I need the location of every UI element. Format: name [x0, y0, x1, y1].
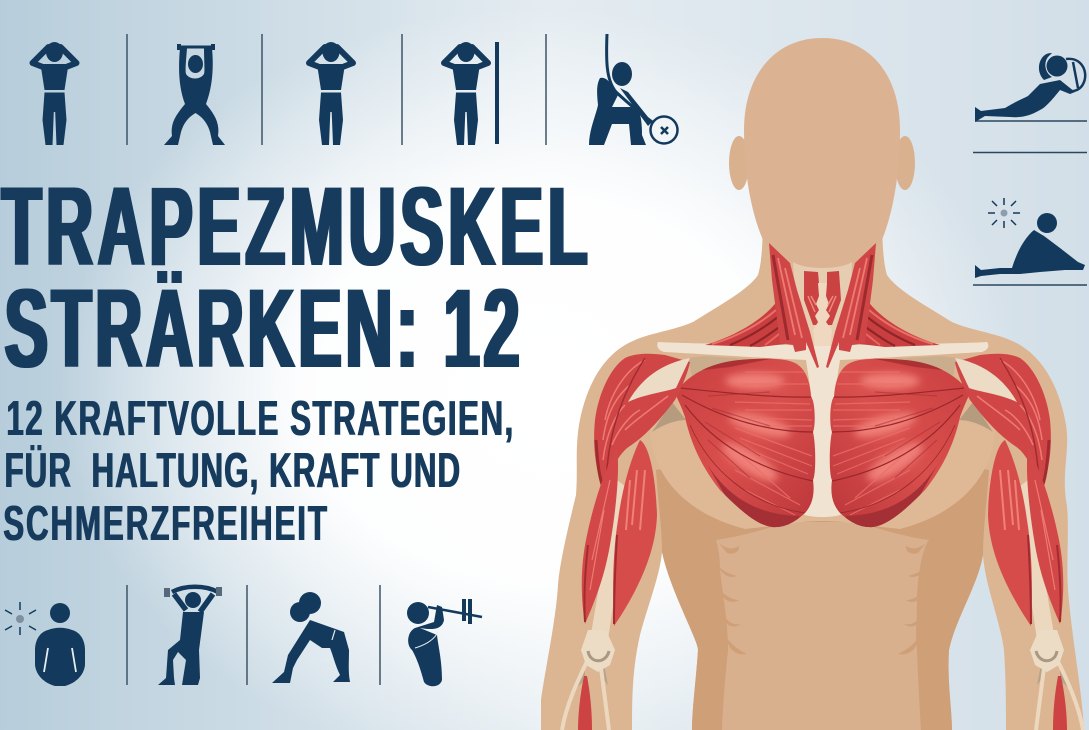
abdomen centre	[716, 522, 929, 730]
chest light area	[650, 380, 995, 529]
left muscle group	[562, 243, 819, 730]
divider lines right column	[973, 121, 1087, 285]
icon: seated stretch with pain burst	[975, 198, 1085, 278]
anatomical torso figure	[541, 38, 1084, 730]
upper arm bone strip	[590, 480, 630, 640]
torso side shading	[656, 440, 989, 730]
ribs	[718, 543, 927, 654]
icon: exercise hands behind head	[32, 42, 76, 145]
subtitle line 2: FÜR HALTUNG, KRAFT UND	[4, 443, 460, 498]
icon: back pain figure	[5, 602, 85, 686]
icon: kneeling with wheel	[589, 34, 678, 145]
right muscle group (mirror)	[826, 243, 1083, 730]
elbow and forearm	[562, 630, 615, 730]
biceps outer	[582, 447, 618, 624]
icon: standing with pole	[444, 42, 497, 145]
trapezius	[705, 300, 785, 347]
pectoralis	[675, 357, 815, 535]
sternum and clavicles	[657, 342, 988, 517]
collar shadow	[688, 356, 957, 376]
deltoid	[594, 354, 690, 492]
icon: standing stretch	[309, 42, 353, 145]
title line 2: STRÄRKEN: 12	[5, 267, 520, 391]
title: TRAPEZMUSKEL	[2, 165, 588, 289]
icon: bent over stretch	[272, 592, 350, 683]
body silhouette	[541, 205, 1084, 730]
icon: prone with ring	[975, 53, 1085, 122]
biceps inner	[613, 440, 657, 626]
armpit shadows	[652, 402, 993, 432]
sternocleidomastoid	[769, 243, 819, 368]
subtitle line 1: 12 KRAFTVOLLE STRATEGIEN,	[6, 391, 513, 446]
neck gap tissue	[793, 262, 852, 345]
head	[744, 38, 900, 268]
neck centre muscles and spine	[804, 271, 841, 352]
dividers bottom row	[127, 585, 380, 685]
subtitle line 3: SCHMERZFREIHEIT	[3, 496, 327, 551]
dividers top row	[127, 34, 546, 145]
icon: overhead bar squat	[164, 44, 225, 145]
ears	[729, 136, 915, 190]
icon: curl with barbell	[407, 599, 482, 686]
icon: overhead barbell lunge	[158, 587, 222, 685]
